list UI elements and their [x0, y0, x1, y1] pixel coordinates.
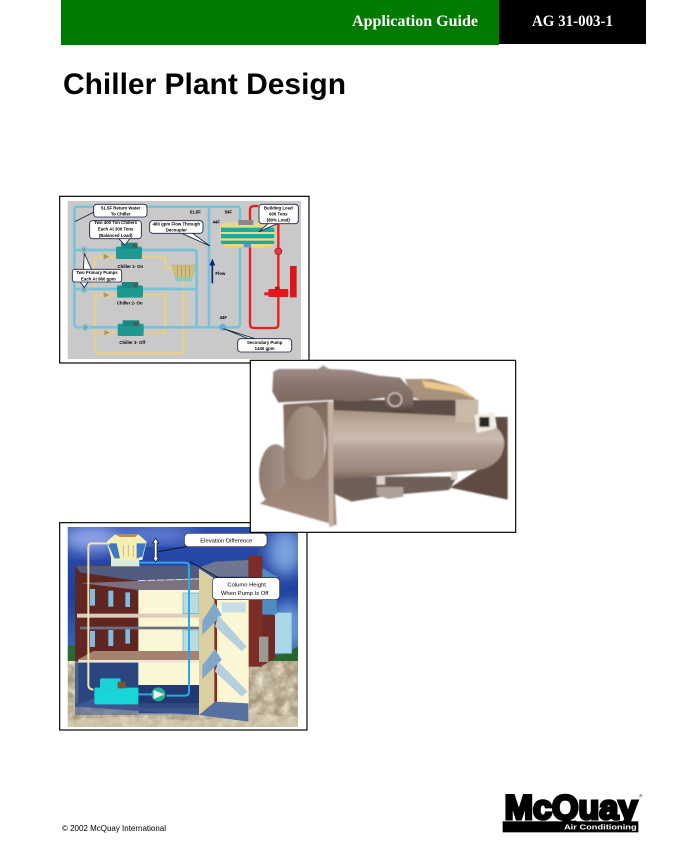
main vessel	[331, 410, 504, 479]
sky background	[62, 525, 305, 667]
callout: elevation difference	[158, 533, 267, 552]
callout: building load: Building Load	[264, 206, 293, 211]
callout: two chillers: Two 400 Ton Chillers	[94, 220, 138, 225]
condenser water piping	[88, 543, 189, 696]
callout: primary pumps: Two Primary Pumps	[76, 270, 118, 275]
vessel end cap	[285, 406, 326, 480]
cooling tower	[172, 265, 196, 281]
callout: column height	[190, 562, 280, 600]
rear piping	[405, 379, 477, 412]
callout: primary pumps	[72, 253, 122, 287]
callout: secondary pump	[223, 329, 292, 352]
plate edge	[328, 402, 334, 527]
diagram labels: 54F	[225, 210, 232, 215]
callout: secondary pump: Secondary Pump	[247, 340, 283, 345]
control panel	[474, 412, 495, 433]
lower piping	[333, 477, 457, 502]
diagram labels	[117, 210, 232, 345]
diagram labels: 44F	[213, 220, 220, 225]
callout: decoupler flow	[150, 221, 210, 246]
header band: green	[61, 0, 499, 45]
chiller	[94, 678, 138, 704]
logo: McQuay Air Conditioning: McQuay	[505, 789, 638, 827]
callout: return water: 51.5F Return Water	[101, 205, 141, 210]
title: Chiller Plant Design	[63, 68, 346, 101]
cooling coil	[220, 220, 275, 247]
diagram labels: Chiller 2- On	[117, 301, 143, 306]
electrical box	[456, 400, 478, 422]
valve wheel	[388, 393, 402, 406]
pump	[151, 687, 165, 701]
callout: return water: To Chiller	[111, 212, 131, 217]
primary and condenser pumps	[80, 246, 226, 336]
chiller 1	[116, 243, 142, 259]
callout: primary pumps: Each At 960 gpm	[81, 276, 116, 281]
callout: column height: When Pump Is Off	[221, 591, 269, 597]
header label: document number: AG 31-003-1	[532, 13, 613, 30]
flow arrow	[211, 261, 214, 283]
callout: building load: 600 Tons	[269, 212, 288, 217]
elevation arrow	[153, 538, 159, 562]
chiller 2	[117, 282, 143, 298]
building interior	[75, 560, 249, 722]
lower vessel	[259, 444, 292, 506]
callout: building load: (80% Load)	[267, 218, 290, 223]
panel: building cross-section with cooling tower	[60, 523, 307, 730]
diagram labels: Chiller 3- Off	[119, 340, 146, 345]
air handler fan and pump	[264, 248, 297, 297]
panel: chiller plant piping diagram	[60, 196, 309, 363]
copyright: © 2002 McQuay International	[62, 823, 166, 833]
header label: Application Guide: Application Guide	[352, 13, 478, 30]
ground and foliage	[68, 646, 298, 727]
callout: two chillers: (Balanced Load)	[99, 233, 133, 238]
chiller 3	[118, 320, 144, 336]
callout: decoupler flow: 480 gpm Flow Through	[153, 221, 200, 226]
callout: elevation difference: Elevation Difference	[200, 538, 252, 544]
condenser water piping	[94, 257, 183, 353]
chilled water piping	[74, 207, 240, 327]
callout: secondary pump: 1440 gpm	[255, 346, 275, 351]
cooling tower	[107, 534, 147, 566]
compressor pipe	[272, 365, 413, 412]
callout: two chillers: Each At 300 Tons	[98, 227, 134, 232]
building load piping	[250, 206, 278, 328]
logo: McQuay Air Conditioning: ®	[639, 792, 643, 799]
dark machinery between vessels	[333, 400, 456, 420]
staircase	[202, 602, 248, 697]
logo: McQuay Air Conditioning: Air Conditioning	[564, 823, 637, 832]
callout: return water	[75, 204, 147, 222]
diagram labels: 51.5F	[190, 210, 201, 215]
left plate	[260, 401, 337, 525]
glass wing and brick tower	[248, 556, 292, 667]
diagram labels: Chiller 1- On	[117, 264, 144, 269]
panel: centrifugal chiller photo	[250, 360, 516, 532]
callout: building load	[259, 204, 298, 232]
diagram labels: Flow	[215, 271, 226, 276]
callout: column height: Column Height	[227, 583, 266, 589]
diagram labels: 44F	[220, 315, 227, 320]
callout: two chillers	[90, 220, 141, 245]
callout: decoupler flow: Decoupler	[166, 227, 187, 232]
header band: black	[499, 0, 646, 44]
right support plate	[450, 417, 508, 500]
